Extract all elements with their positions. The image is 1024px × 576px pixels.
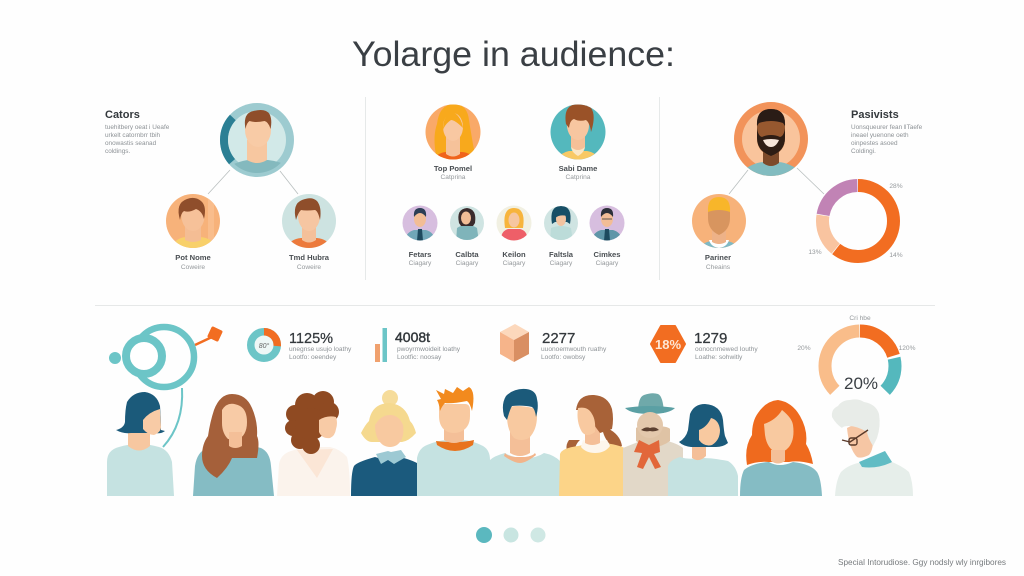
person 1: woman with navy bob bbox=[107, 392, 174, 496]
label: top left: Top Pomel bbox=[434, 164, 472, 173]
label: right member bbox=[289, 253, 330, 271]
value: 4008t bbox=[395, 329, 430, 345]
caption: oonocnmewed Iouthy bbox=[695, 346, 758, 353]
label: top left bbox=[434, 164, 472, 181]
person 3: woman with curly hair bbox=[277, 391, 350, 496]
person 11: elderly person with white hair bbox=[832, 399, 913, 496]
icon: bars bbox=[375, 328, 387, 362]
label: blond man: Cheains bbox=[706, 264, 731, 271]
label: small 1 bbox=[409, 250, 432, 267]
icon: cube bbox=[500, 324, 529, 362]
label: top right: Sabi Dame bbox=[559, 164, 597, 173]
stat: 2277 bbox=[500, 324, 607, 362]
avatar: main creator bbox=[220, 103, 294, 180]
text block: positivists description: Coldingi. bbox=[851, 148, 876, 155]
avatar: small 5 bbox=[590, 206, 624, 242]
label: small 3: Ciagary bbox=[503, 260, 526, 267]
label: left member: Coweire bbox=[181, 264, 205, 271]
donut chart: 14% bbox=[889, 252, 903, 259]
caption bbox=[397, 346, 461, 361]
value: 1125% bbox=[289, 331, 333, 347]
icon: hexagon: 18% bbox=[655, 337, 681, 352]
label: left member bbox=[175, 253, 211, 271]
value: 1279 bbox=[694, 330, 727, 347]
text block: creators description: coldings. bbox=[105, 148, 130, 155]
avatar: right member bbox=[282, 194, 336, 250]
avatar: small 3 bbox=[496, 206, 532, 243]
label: right member: Coweire bbox=[297, 264, 321, 271]
caption: unegnse usujo loathy bbox=[289, 346, 352, 353]
caption bbox=[695, 346, 758, 361]
gauge chart: 120% bbox=[899, 345, 916, 352]
gauge chart: 20% bbox=[844, 374, 878, 393]
gauge chart: 20% bbox=[797, 345, 811, 352]
gauge chart bbox=[797, 315, 916, 401]
text block: positivists description bbox=[851, 124, 923, 155]
label: blond man bbox=[705, 253, 731, 271]
label: small 1: Ciagary bbox=[409, 260, 432, 267]
stat: 1279 bbox=[651, 326, 758, 362]
title: Yolarge in audience: bbox=[352, 35, 675, 74]
panel: middle audience group bbox=[402, 104, 624, 267]
caption: Lootfo: oeendey bbox=[289, 354, 337, 361]
label: small 2: Calbta bbox=[455, 250, 479, 259]
pagination dots bbox=[476, 527, 546, 543]
avatar: left member bbox=[166, 194, 220, 250]
panel: creators bbox=[105, 103, 336, 271]
label: small 1: Fetars bbox=[409, 250, 431, 259]
caption: pwoyrmwoideit loathy bbox=[397, 346, 461, 353]
person 2: woman with long brown hair bbox=[193, 394, 274, 496]
caption bbox=[289, 346, 352, 361]
person 5: man with orange hair bbox=[417, 387, 492, 496]
text block: creators description bbox=[105, 124, 170, 155]
person 10: woman with red hair bbox=[740, 400, 822, 496]
donut chart: 28% bbox=[889, 183, 903, 190]
avatar: small 2 bbox=[450, 206, 484, 242]
label: small 5 bbox=[593, 250, 621, 267]
label: small 3 bbox=[502, 250, 526, 267]
label: top right: Catprina bbox=[566, 174, 591, 181]
icon: small donut: 80° bbox=[259, 342, 269, 350]
value: 2277 bbox=[542, 330, 575, 347]
stat: 4008t bbox=[375, 328, 461, 362]
gauge chart: Cri hbe bbox=[849, 315, 871, 322]
person 8: old man with hat and bow tie bbox=[623, 393, 683, 496]
avatar: top right man bbox=[550, 104, 606, 162]
stat: 1125% bbox=[251, 331, 352, 361]
text block: positivists description: oinpestes asoed bbox=[851, 140, 898, 147]
label: top left: Catprina bbox=[441, 174, 466, 181]
heading: Pasivists: Pasivists bbox=[851, 109, 899, 121]
avatar: blond man bbox=[692, 194, 746, 250]
footer note: Special Intorudiose. Ggy nodsly wly inrgibores bbox=[838, 558, 1006, 567]
text block: creators description: urkelt catornbrr tbih bbox=[105, 132, 160, 139]
avatar: small 4 bbox=[544, 206, 578, 242]
label: small 2: Ciagary bbox=[456, 260, 479, 267]
heading: Cators: Cators bbox=[105, 109, 140, 121]
donut chart bbox=[808, 183, 903, 259]
text block: positivists description: ineael yuenone oeth bbox=[851, 132, 909, 139]
person 6: man with navy hair bbox=[490, 389, 563, 496]
label: small 4: Faltsla bbox=[549, 250, 574, 259]
label: small 5: Ciagary bbox=[596, 260, 619, 267]
label: small 4 bbox=[549, 250, 574, 267]
text block: creators description: tuehitbery oeat i Ueafe bbox=[105, 124, 170, 131]
label: small 2 bbox=[455, 250, 479, 267]
caption: uuonoemwouth ruathy bbox=[541, 346, 607, 353]
label: left member: Pot Nome bbox=[175, 253, 211, 262]
person 9: woman with navy hair bbox=[668, 404, 738, 496]
panel: positivists bbox=[692, 102, 923, 271]
text block: positivists description: Uonsqueurer fean ‖Taefe bbox=[851, 124, 923, 131]
audience illustration: row of people bbox=[107, 387, 913, 496]
caption bbox=[541, 346, 607, 361]
connector lines bbox=[208, 170, 298, 194]
label: blond man: Pariner bbox=[705, 253, 731, 262]
donut chart: 13% bbox=[808, 249, 822, 256]
avatar: smiling man bbox=[734, 102, 808, 180]
caption: Lootfo: owobsy bbox=[541, 354, 586, 361]
label: small 4: Ciagary bbox=[550, 260, 573, 267]
person 7: woman with ponytails bbox=[559, 395, 633, 496]
label: top right bbox=[559, 164, 597, 181]
person 4: blond woman with bun bbox=[351, 390, 426, 496]
caption: Lootfic: noosay bbox=[397, 354, 442, 361]
caption: Loathe: sohwitly bbox=[695, 354, 743, 361]
label: small 3: Keilon bbox=[502, 250, 526, 259]
label: right member: Tmd Hubra bbox=[289, 253, 330, 262]
label: small 5: Cimkes bbox=[593, 250, 621, 259]
text block: creators description: onowastis seanad bbox=[105, 140, 157, 147]
avatar: small 1 bbox=[402, 206, 438, 242]
avatar: top left woman bbox=[426, 104, 480, 162]
decorative rings illustration bbox=[109, 326, 223, 447]
connector lines bbox=[729, 168, 824, 194]
